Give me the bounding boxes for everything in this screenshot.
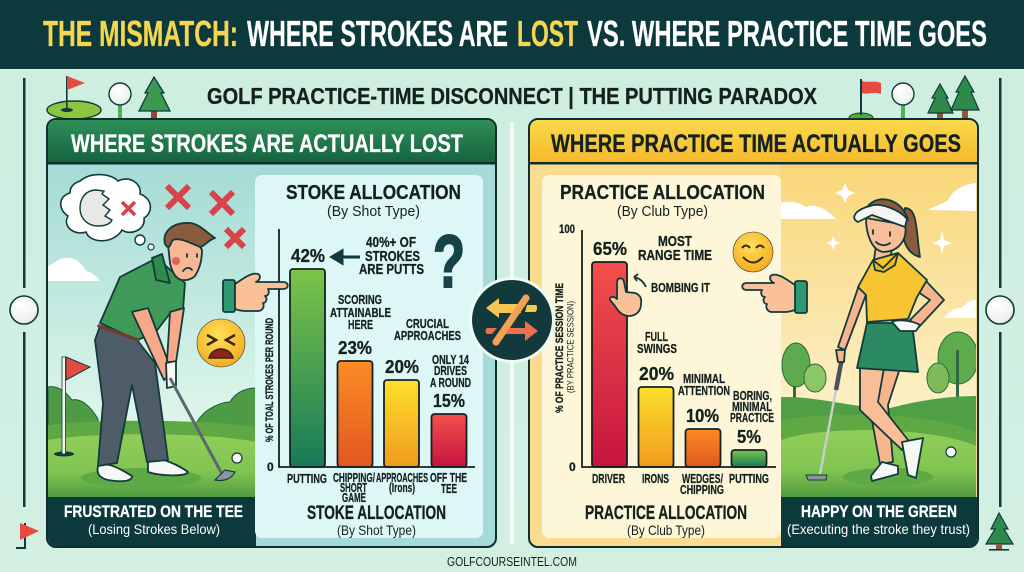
clouds xyxy=(781,183,976,318)
emoji: distressed face xyxy=(197,319,245,367)
bar: putting 5% xyxy=(732,450,766,467)
glove xyxy=(166,361,176,388)
category labels: DRIVER xyxy=(592,472,625,486)
skirt xyxy=(857,323,918,372)
value: 20%: 20% xyxy=(385,356,419,377)
glove xyxy=(892,320,920,331)
category labels: CHIPPING/ xyxy=(333,471,375,485)
callout: putts xyxy=(359,234,424,278)
caption bar: (Executing the stroke they trust) xyxy=(787,521,970,537)
value: 23%: 23% xyxy=(338,337,372,358)
belt xyxy=(99,326,138,340)
ponytail xyxy=(902,208,920,257)
chart subtitle: (By Club Type) xyxy=(617,203,708,220)
shirt xyxy=(100,258,185,340)
category labels xyxy=(287,471,467,505)
y axis label: % OF TOAL STROKES PER ROUND xyxy=(264,318,276,442)
ground xyxy=(781,396,976,432)
cloud xyxy=(48,258,100,281)
icon: corner tree xyxy=(986,513,1013,551)
left arrow xyxy=(486,298,537,318)
value: 42%: 42% xyxy=(291,245,325,266)
scene: happy golfer xyxy=(781,165,978,497)
callout: drives: A ROUND xyxy=(430,376,471,390)
chart card: stroke allocation xyxy=(255,175,483,538)
shoes xyxy=(97,464,132,481)
icon: pointing hand right xyxy=(742,275,807,313)
callout: scoring xyxy=(330,293,391,332)
bar: approaches 20% xyxy=(384,380,419,467)
bar: off the tee 15% xyxy=(432,414,466,467)
title banner: THE MISMATCH: xyxy=(43,13,238,54)
callout: boring minimal practice: BORING, xyxy=(733,389,772,403)
category labels xyxy=(592,472,769,497)
panel: where practice time goes xyxy=(529,119,978,547)
chart footer subtitle: (By Club Type) xyxy=(627,522,705,538)
callout: most range time: RANGE TIME xyxy=(638,247,712,264)
bar: irons 20% xyxy=(638,387,674,467)
right side rail with golf ball xyxy=(986,78,1014,507)
visor xyxy=(854,205,907,227)
sparkles xyxy=(826,183,952,255)
left side rail with golf ball xyxy=(10,78,38,507)
callout: putts: STROKES xyxy=(365,248,420,265)
trees xyxy=(782,332,978,400)
chart footer subtitle: (By Shot Type) xyxy=(337,522,416,538)
category labels: APPROACHES xyxy=(376,471,428,485)
callout: full swings: SWINGS xyxy=(637,342,677,356)
slash xyxy=(496,298,526,342)
website credit: GOLFCOURSEINTEL.COM xyxy=(447,554,577,569)
icon: corner flag xyxy=(16,523,39,549)
callout: boring minimal practice: MINIMAL xyxy=(732,400,772,414)
icon: pine trees right xyxy=(928,76,979,119)
chart footer title: PRACTICE ALLOCATION xyxy=(585,503,747,524)
category labels: CHIPPING xyxy=(680,483,724,497)
title banner xyxy=(0,0,1024,69)
collar xyxy=(152,254,170,283)
category labels: PUTTING xyxy=(287,472,327,486)
face xyxy=(168,236,202,280)
caption bar: FRUSTRATED ON THE TEE xyxy=(64,502,243,521)
callout: bombing it: BOMBING IT xyxy=(651,281,710,295)
icon: ball on tee left xyxy=(109,83,131,119)
back leg xyxy=(870,368,900,464)
callout: boring minimal practice xyxy=(730,389,774,425)
value: 20%: 20% xyxy=(639,363,674,384)
value: 5%: 5% xyxy=(737,426,761,447)
hair band xyxy=(868,199,908,220)
eyes and frown xyxy=(183,254,197,271)
chart subtitle: (By Shot Type) xyxy=(327,203,420,220)
y axis label: % OF PRACTICE SESSION TIME xyxy=(554,283,566,413)
putter xyxy=(818,390,838,474)
caption bar xyxy=(781,497,977,546)
bar: driver 65% xyxy=(592,262,627,467)
callout: drives xyxy=(430,353,471,390)
callout: drives: ONLY 14 xyxy=(432,353,469,367)
caption bar xyxy=(48,497,256,546)
arrow to putting xyxy=(332,251,360,263)
hair xyxy=(164,223,215,247)
axis ticks: 100 xyxy=(559,222,575,236)
center mismatch badge xyxy=(469,277,555,363)
ground xyxy=(48,420,255,442)
callout: putts: 40%+ OF xyxy=(366,234,416,251)
category labels: (Irons) xyxy=(389,481,415,495)
caption bar: (Losing Strokes Below) xyxy=(88,521,220,537)
icon: pine tree left xyxy=(139,77,170,119)
y axis label xyxy=(554,283,576,413)
icon: ball on tee right xyxy=(892,83,914,119)
bar: putting 42% xyxy=(290,269,325,467)
happy golfer figure xyxy=(836,199,944,481)
title banner: LOST xyxy=(517,13,578,54)
bar: wedges 10% xyxy=(686,429,720,467)
callout: most range time xyxy=(638,233,712,264)
category labels: SHORT xyxy=(340,481,367,495)
chart title: PRACTICE ALLOCATION xyxy=(560,182,765,204)
bar: chipping 23% xyxy=(338,361,372,467)
emoji: smiling face xyxy=(733,232,773,272)
title banner: WHERE STROKES ARE xyxy=(247,13,508,54)
question mark: ? xyxy=(433,220,465,303)
icon: tapping hand xyxy=(610,278,641,316)
golf club xyxy=(170,378,222,474)
red crosses xyxy=(167,186,244,247)
subtitle: GOLF PRACTICE-TIME DISCONNECT | THE PUTTING PARADOX xyxy=(207,83,818,109)
category labels: GAME xyxy=(342,491,366,505)
callout: putts: ARE PUTTS xyxy=(359,261,424,278)
center divider xyxy=(510,122,514,544)
callout: crucial approaches: APPROACHES xyxy=(394,329,461,343)
arm right xyxy=(910,280,944,328)
chart card: practice allocation xyxy=(542,175,781,538)
panel heading bar xyxy=(530,120,977,163)
callout: scoring: ATTAINABLE xyxy=(330,306,391,320)
neck xyxy=(873,248,892,259)
axis ticks: 0 xyxy=(569,460,576,474)
callout: minimal attention xyxy=(678,372,730,398)
category labels: WEDGES/ xyxy=(682,472,723,486)
value: 10%: 10% xyxy=(686,405,719,426)
scene: frustrated golfer xyxy=(48,165,256,497)
axis zero: 0 xyxy=(267,460,274,474)
callout: scoring: SCORING xyxy=(338,293,382,307)
callout: full swings xyxy=(637,330,677,356)
callout: most range time: MOST xyxy=(658,233,692,250)
callout: minimal attention: MINIMAL xyxy=(683,372,725,386)
arm xyxy=(132,308,172,380)
value: 15%: 15% xyxy=(433,390,465,411)
panel heading: WHERE STROKES ARE ACTUALLY LOST xyxy=(71,130,463,158)
panel frame xyxy=(529,119,978,547)
flag in scene xyxy=(54,357,90,456)
callout: crucial approaches: CRUCIAL xyxy=(406,317,449,331)
callout: crucial approaches xyxy=(394,317,461,343)
panel heading bar xyxy=(48,120,495,163)
icon: pointing hand left xyxy=(223,274,288,312)
category labels: IRONS xyxy=(642,472,669,486)
right arrow xyxy=(486,321,538,341)
category labels: OFF THE xyxy=(430,471,467,485)
callout: minimal attention: ATTENTION xyxy=(678,384,730,398)
shirt xyxy=(858,253,927,322)
callout: boring minimal practice: PRACTICE xyxy=(730,411,774,425)
callout: drives: DRIVES xyxy=(434,364,467,378)
collar xyxy=(873,253,898,272)
curved arrow xyxy=(634,274,646,287)
value: 65%: 65% xyxy=(593,238,627,259)
bushes xyxy=(48,387,256,430)
front leg xyxy=(860,368,908,450)
axes xyxy=(279,229,475,467)
chart footer title: STOKE ALLOCATION xyxy=(307,503,446,524)
y axis label: (BY PRACTICE SESSION) xyxy=(566,301,576,393)
caption bar: HAPPY ON THE GREEN xyxy=(801,502,957,521)
callout: scoring: HERE xyxy=(348,318,373,332)
chart title: STOKE ALLOCATION xyxy=(286,182,461,204)
icon: flag right xyxy=(849,79,881,123)
thought bubble with cracked ball xyxy=(61,175,154,250)
frustrated golfer figure xyxy=(95,223,215,481)
callout: full swings: FULL xyxy=(645,330,668,344)
trousers xyxy=(95,326,168,466)
axis ticks xyxy=(559,222,576,474)
axes xyxy=(582,230,776,467)
shoes xyxy=(871,462,898,481)
panel: where strokes are lost xyxy=(47,119,496,547)
icon: putting green with flag xyxy=(47,76,101,119)
panel frame xyxy=(47,119,496,547)
category labels: PUTTING xyxy=(729,472,769,486)
arm left xyxy=(838,288,867,350)
head xyxy=(866,218,906,252)
category labels: TEE xyxy=(441,482,457,496)
eyes and smile xyxy=(873,230,890,245)
